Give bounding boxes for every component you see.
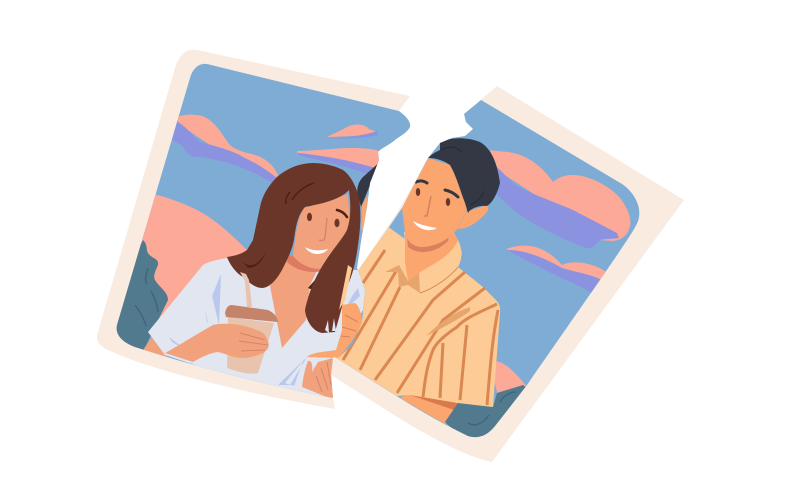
straw (240, 272, 252, 307)
man's hand on woman's shoulder (307, 303, 362, 358)
man's eyes (416, 188, 450, 206)
striped shirt (333, 226, 500, 407)
neck shadow (287, 255, 324, 272)
man's smile (413, 221, 437, 230)
panel: right photo fragment (320, 86, 684, 462)
cloud left (172, 115, 279, 184)
woman's white shirt (148, 258, 365, 398)
woman's eyebrow (337, 210, 347, 217)
man's hair (428, 138, 500, 213)
man's nose (424, 196, 431, 216)
sleeve shadow (410, 395, 458, 410)
woman's eyes (307, 213, 340, 227)
cloud top right (327, 125, 378, 139)
sky (336, 100, 640, 438)
left photo frame (97, 50, 410, 409)
cloud middle right (297, 148, 379, 175)
teal sleeve (445, 385, 530, 440)
woman's hair (227, 163, 360, 333)
woman's neck and chest (270, 258, 320, 348)
woman's nose (319, 218, 327, 241)
salmon hill (118, 194, 247, 323)
coffee cup (225, 272, 278, 374)
woman's smile (305, 247, 328, 254)
illustration: torn couple photo (96, 50, 684, 462)
sky (110, 60, 420, 405)
arm (400, 394, 460, 424)
teal bush (116, 240, 168, 350)
man's lower hand (302, 358, 334, 400)
cup body (227, 317, 274, 374)
right photo scene (336, 100, 640, 438)
left photo scene (110, 60, 420, 405)
woman's far arm (143, 337, 166, 357)
large cloud (490, 150, 631, 248)
back hair (308, 280, 315, 290)
man's eyebrows (416, 181, 458, 197)
man's hair fragment (357, 164, 378, 207)
neck shadow (407, 236, 449, 252)
cup lid (225, 305, 278, 322)
collar (385, 225, 461, 293)
man's cheek fragment (361, 195, 368, 230)
right photo frame (331, 86, 684, 462)
man's ear (458, 205, 488, 229)
man's face (402, 158, 470, 247)
hair highlight strip (339, 265, 352, 310)
panel: left photo fragment (97, 50, 420, 409)
woman's face (293, 194, 350, 269)
small cloud (506, 246, 606, 296)
woman's forearm and hand (165, 324, 269, 362)
hill (494, 361, 526, 393)
